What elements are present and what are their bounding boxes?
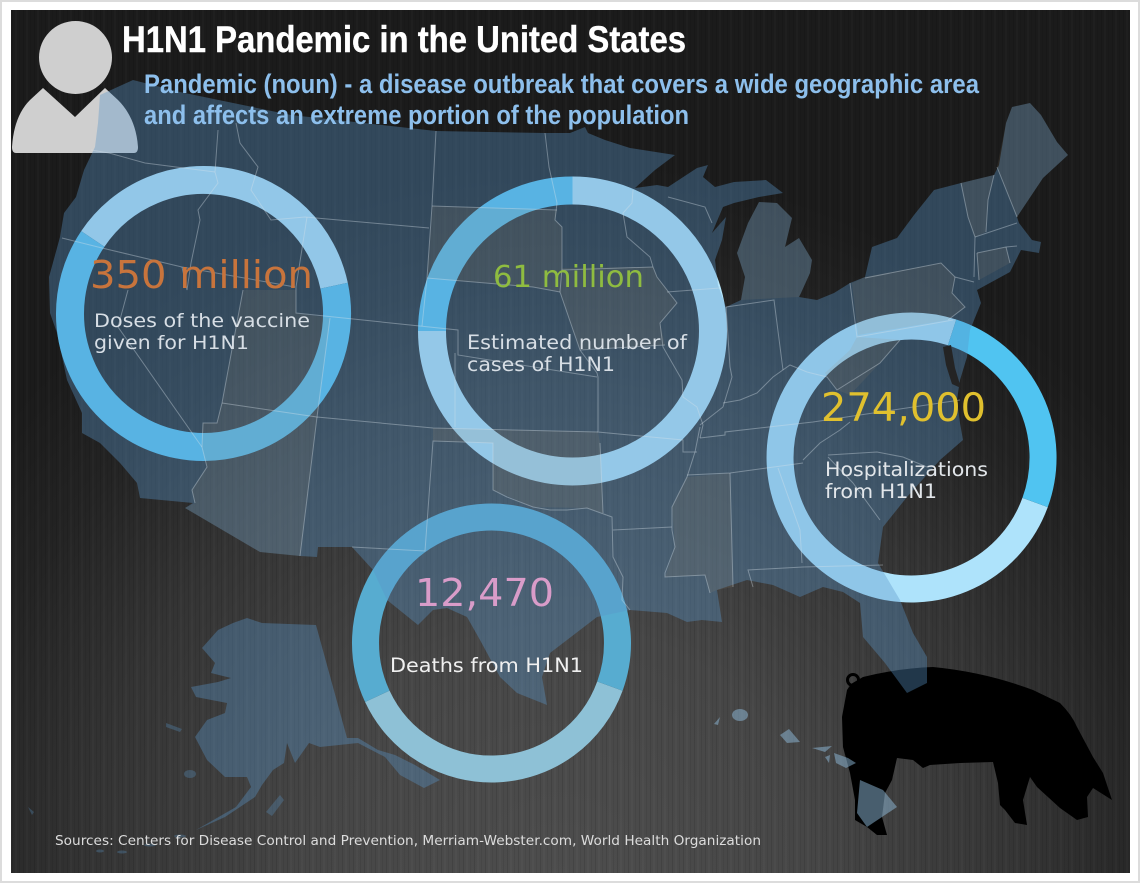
stat: deaths: 12,470: [415, 571, 554, 615]
stat: vaccine doses: Doses of the vaccine: [94, 310, 310, 332]
stat: estimated cases: [467, 260, 688, 376]
definition text: Pandemic (noun) - a disease outbreak that covers a wide geographic area: [144, 69, 980, 99]
stat: estimated cases: 61 million: [493, 260, 644, 295]
map: Alaska: [191, 618, 440, 830]
map: Hawaiian islands: [714, 709, 897, 827]
stat: vaccine doses: [90, 253, 313, 354]
ring: deaths: [365, 517, 617, 769]
ring: hospitalizations: [780, 326, 1043, 589]
map: Chesapeake Bay: [943, 345, 961, 388]
stat: hospitalizations: Hospitalizations: [825, 458, 988, 481]
sources: Sources: Centers for Disease Control and Prevention, Merriam-Webster.com, World Health Organization: [55, 833, 761, 849]
map of the United States: [28, 80, 1068, 854]
definition text: and affects an extreme portion of the population: [144, 100, 689, 130]
stat: vaccine doses: 350 million: [90, 253, 313, 297]
stat: hospitalizations: [821, 386, 988, 503]
stat: estimated cases: Estimated number of: [467, 331, 688, 354]
icon: person silhouette: [12, 21, 138, 153]
stat: deaths: [390, 571, 583, 677]
stat: hospitalizations: 274,000: [821, 386, 986, 431]
ring: vaccine doses: [70, 180, 337, 447]
stat: deaths: Deaths from H1N1: [390, 654, 583, 677]
definition text: [144, 69, 980, 130]
stat: vaccine doses: given for H1N1: [94, 332, 249, 354]
map: lighter grey states: [185, 103, 1068, 593]
ring: estimated cases: [432, 190, 713, 472]
title: H1N1 Pandemic in the United States: [122, 19, 686, 60]
icon: pig silhouette: [842, 667, 1112, 835]
map: state borders: [62, 123, 1017, 610]
stat: hospitalizations: from H1N1: [825, 480, 937, 503]
map: contiguous states: [49, 80, 1068, 705]
map: Alaskan islands: [28, 723, 284, 854]
stat: estimated cases: cases of H1N1: [467, 353, 615, 376]
